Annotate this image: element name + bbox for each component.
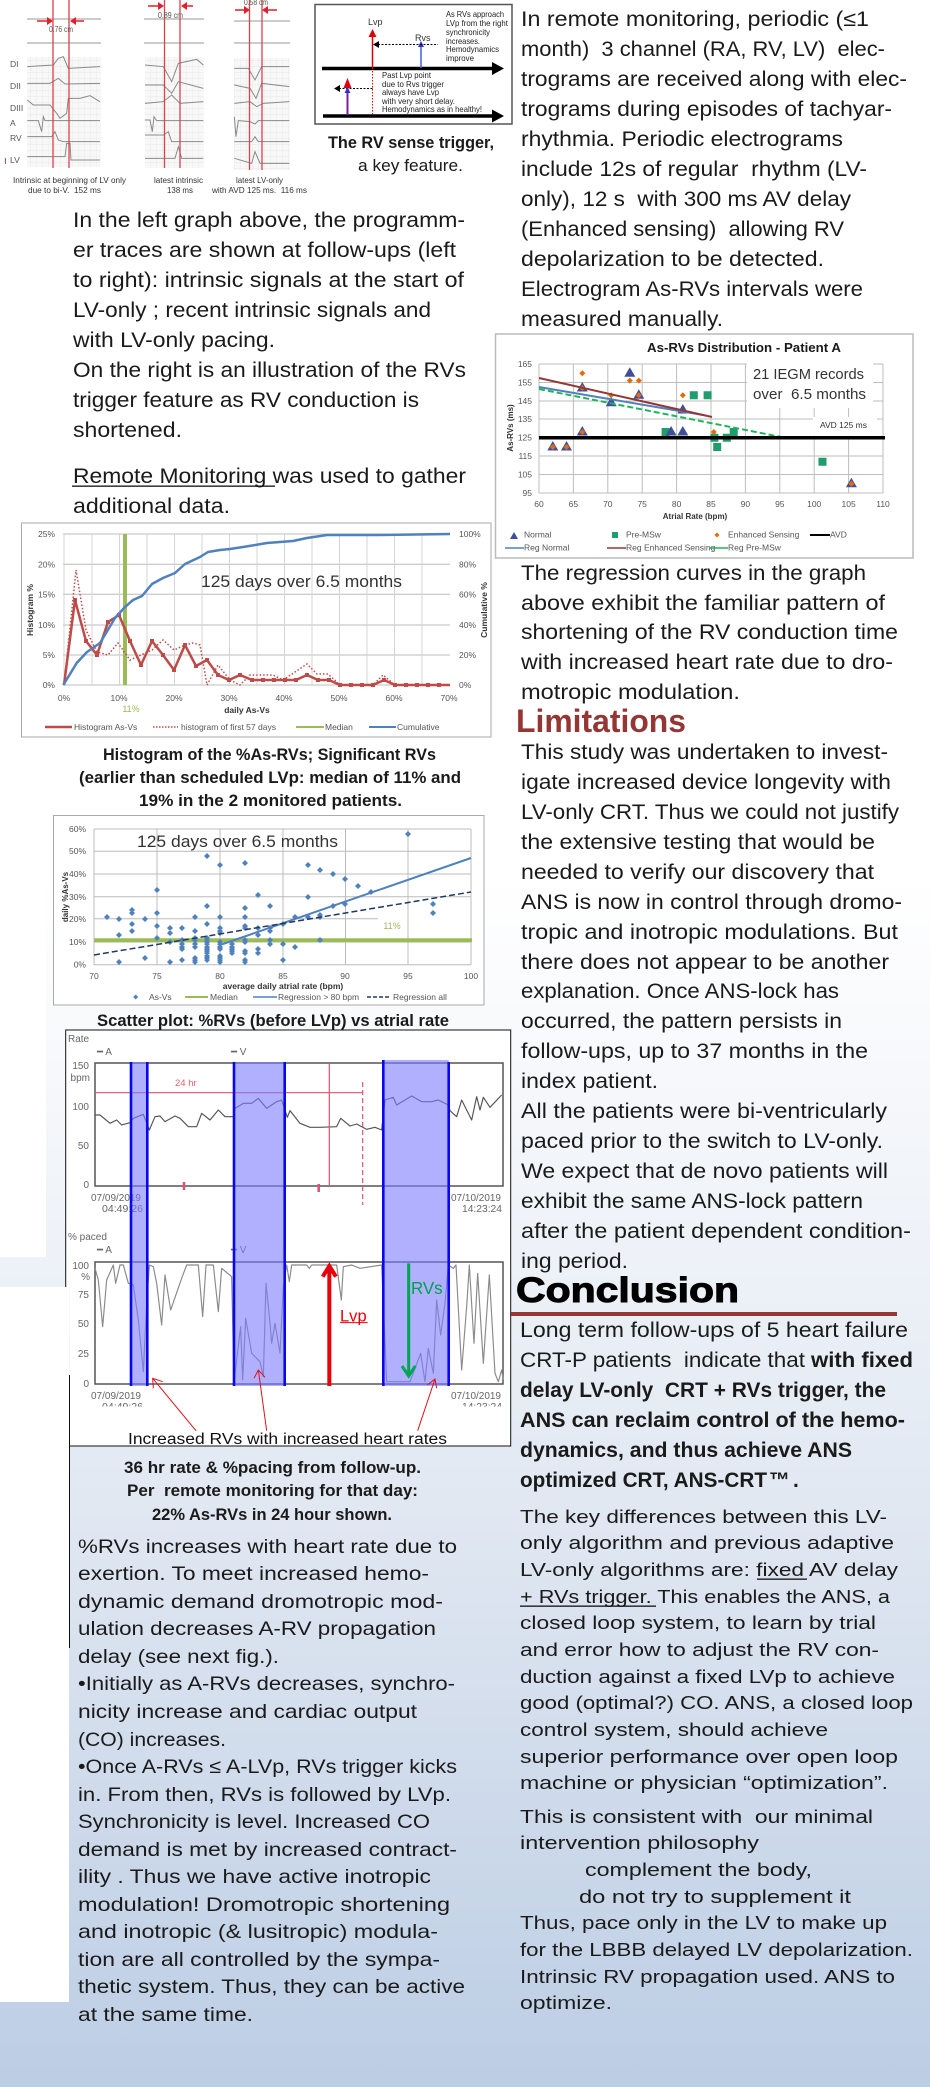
text block: minimal intervention philosophy: complement the body,: [585, 1859, 812, 1880]
x axis labels: 100: [807, 499, 822, 509]
chart: histogram of %As-RVs: 11%: [122, 704, 140, 714]
text block: key differences: superior performance over open loop: [520, 1746, 898, 1767]
x axis labels: 85: [706, 499, 716, 509]
labels of the trend plots: 07/09/2019: [91, 1391, 141, 1402]
text block: %RVs increases with heart rate: [78, 1536, 465, 2026]
text block: remote monitoring electrograms: (Enhanced sensing) allowing RV: [521, 218, 844, 241]
text block: limitations: occurred, the pattern persists in: [521, 1010, 842, 1033]
caption: trend plot: 36 hr rate & %pacing from follow-up.: [124, 1458, 421, 1477]
text block: programmer traces description: shortened.: [73, 419, 182, 442]
diagram: RV sense trigger illustration: Hemodynamics: [446, 44, 499, 54]
legend: Regression all: [393, 992, 447, 1002]
text block: limitations: there does not appear to be another: [521, 951, 889, 974]
x axis labels: 60%: [385, 693, 403, 703]
labels of the trend plots: [68, 1034, 502, 1413]
chart: 36 hour rate and pacing trend: 24 hr: [175, 1078, 197, 1089]
figure: programmer ECG traces at three follow-ups: 0.89 cm: [158, 10, 183, 20]
legend: Reg Normal: [524, 542, 569, 552]
y axis labels: 105: [518, 470, 532, 480]
text block: programmer traces description: er traces are shown at follow-ups (left: [73, 239, 456, 262]
text block: conclusion summary: delay LV-only CRT + RVs trigger, the: [520, 1379, 886, 1402]
y axis labels: 95: [523, 488, 532, 498]
legend: Median: [210, 992, 238, 1002]
labels of the trend plots: 14:23:24: [462, 1204, 502, 1215]
text block: conclusion summary: CRT-P patients indicate that: [520, 1349, 805, 1372]
text block: regression curves: motropic modulation.: [521, 681, 740, 704]
x axis labels: 70: [89, 971, 99, 981]
figure: programmer ECG traces at three follow-ups: [5, 0, 307, 195]
text block: minimal intervention philosophy: intervention philosophy: [520, 1832, 760, 1853]
labels of the trend plots: %: [81, 1272, 90, 1283]
text block: minimal intervention philosophy: for the LBBB delayed LV depolarization.: [520, 1939, 913, 1960]
x axis labels: 100: [464, 971, 478, 981]
left axis labels: 25%: [38, 529, 55, 539]
labels of the trend plots: 150: [72, 1061, 89, 1072]
text block: key differences: only algorithm and previous adaptive: [520, 1532, 894, 1553]
diagram: RV sense trigger illustration: Past Lvp point: [382, 70, 432, 80]
labels of the trend plots: 100: [72, 1261, 89, 1272]
x axis labels: 75: [152, 971, 162, 981]
arrow: Lvp: Lvp: [340, 1307, 367, 1326]
text block: remote monitoring electrograms: trograms during episodes of tachyar-: [521, 98, 892, 121]
text block: remote monitoring electrograms: Electrogram As-RVs intervals were: [521, 278, 863, 301]
caption: trend plot: 22% As-RVs in 24 hour shown.: [152, 1505, 392, 1524]
text block: limitations: needed to verify our discovery that: [521, 861, 874, 884]
figure: programmer ECG traces at three follow-ups: latest intrinsic: [154, 175, 204, 185]
left axis labels: [38, 529, 55, 690]
labels of the trend plots: 07/10/2019: [451, 1391, 501, 1402]
text block: regression curves: The regression curves in the graph: [521, 562, 866, 585]
x axis labels: 30%: [220, 693, 238, 703]
text block: %RVs increases with heart rate: in. From then, RVs is followed by LVp.: [78, 1784, 451, 1806]
text block: conclusion summary: ANS can reclaim control of the hemo-: [520, 1409, 905, 1432]
labels of the trend plots: 07/09/2019: [91, 1193, 141, 1204]
right axis labels: 60%: [459, 590, 476, 600]
text block: limitations: index patient.: [521, 1070, 658, 1093]
diagram: RV sense trigger illustration: with very short delay.: [381, 96, 455, 106]
y axis labels: 40%: [69, 869, 86, 879]
text block: %RVs increases with heart rate: and inotropic (& lusitropic) modula-: [78, 1921, 438, 1943]
legend: AVD: [830, 530, 847, 540]
labels of the trend plots: 50: [78, 1319, 89, 1330]
text block: limitations: This study was undertaken to invest-: [521, 741, 888, 764]
text block: limitations: the extensive testing that would be: [521, 831, 875, 854]
text block: remote monitoring note: [72, 465, 466, 518]
labels of the trend plots: 100: [72, 1102, 89, 1113]
regression lines and AVD line: [539, 378, 885, 438]
text block: %RVs increases with heart rate: ulation decreases A-RV propagation: [78, 1618, 436, 1640]
y axis labels: 115: [518, 451, 532, 461]
text block: minimal intervention philosophy: Intrinsic RV propagation used. ANS to: [520, 1966, 895, 1987]
diagram: RV sense trigger illustration: Rvs: [415, 33, 431, 43]
right axis labels: 20%: [459, 650, 476, 660]
diagram: RV sense trigger illustration: Lvp: [368, 17, 383, 27]
labels of the trend plots: ━ V: [230, 1047, 247, 1058]
legend: Regression > 80 bpm: [278, 992, 359, 1002]
legend: [505, 530, 847, 552]
left axis labels: 20%: [38, 560, 55, 570]
labels of the trend plots: 75: [78, 1290, 89, 1301]
text block: %RVs increases with heart rate: Synchronicity is level. Increased CO: [78, 1811, 430, 1833]
text block: key differences: The key differences between this LV-: [520, 1506, 887, 1527]
labels of the trend plots: % paced: [68, 1232, 107, 1243]
labels of the trend plots: 0: [83, 1180, 89, 1191]
chart: As-RVs distribution patient A: [496, 334, 913, 558]
figure: programmer ECG traces at three follow-ups: with AVD 125 ms. 116 ms: [211, 185, 307, 195]
y axis labels: 165: [518, 359, 532, 369]
x axis labels: 0%: [58, 693, 71, 703]
text block: key differences: LV-only algorithms are: fixed AV delay: [520, 1559, 899, 1580]
text block: regression curves: shortening of the RV conduction time: [521, 621, 898, 644]
text block: key differences: and error how to adjust the RV con-: [520, 1639, 879, 1660]
caption: trend plot: Per remote monitoring for that day:: [127, 1481, 418, 1500]
figure: programmer ECG traces at three follow-ups: LV: [10, 155, 20, 165]
annotation: record count: over 6.5 months: [753, 386, 866, 403]
text block: key differences: closed loop system, to learn by trial: [520, 1612, 876, 1633]
chart: scatter plot: [54, 816, 484, 1005]
text block: programmer traces description: trigger feature as RV conduction is: [73, 389, 419, 412]
chart: scatter plot: daily %As-Vs: [61, 871, 70, 922]
figure: programmer ECG traces at three follow-ups: A: [10, 118, 16, 128]
arrow: RVs: [402, 1263, 443, 1376]
labels of the trend plots: Rate: [68, 1034, 90, 1045]
x axis labels: 90: [741, 499, 750, 509]
annotation: 125 days: 125 days over 6.5 months: [201, 572, 402, 591]
text block: minimal intervention philosophy: This is consistent with our minimal: [520, 1806, 873, 1827]
text block: limitations: ANS is now in control through dromo-: [521, 891, 902, 914]
y axis labels: 50%: [69, 846, 86, 856]
labels of the trend plots: 04:49:26: [102, 1204, 143, 1215]
text block: key differences: good (optimal?) CO. ANS, a closed loop: [520, 1692, 913, 1713]
caption: histogram: (earlier than scheduled LVp: median of 11% and: [79, 768, 461, 787]
y axis labels: 10%: [69, 937, 86, 947]
x axis labels: 20%: [165, 693, 183, 703]
text block: %RVs increases with heart rate: demand is met by increased contract-: [78, 1839, 457, 1861]
text block: limitations: tropic and inotropic modulations. But: [521, 921, 898, 944]
diagram: RV sense trigger illustration: due to Rvs trigger: [382, 79, 444, 89]
left axis labels: 15%: [38, 590, 55, 600]
figure: programmer ECG traces at three follow-ups: DI: [10, 59, 18, 69]
text block: remote monitoring electrograms: rhythmia. Periodic electrograms: [521, 128, 843, 151]
text block: minimal intervention philosophy: [520, 1806, 913, 2013]
labels of the trend plots: ━ V: [230, 1245, 247, 1256]
figure: programmer ECG traces at three follow-ups: due to bi-V. 152 ms: [28, 185, 101, 195]
arrow: Lvp: [323, 1266, 368, 1386]
text block: remote monitoring electrograms: [521, 8, 907, 331]
x axis labels: 90: [340, 971, 350, 981]
labels of the trend plots: ━ A: [96, 1245, 112, 1256]
data points: [547, 367, 857, 487]
text block: limitations: after the patient dependent condition-: [521, 1220, 911, 1243]
legend: [45, 722, 440, 732]
left axis labels: 0%: [43, 680, 55, 690]
y axis labels: 60%: [69, 824, 86, 834]
diagram: RV sense trigger illustration: As RVs approach: [446, 9, 504, 19]
x axis labels: 110: [876, 499, 890, 509]
x axis labels: 85: [278, 971, 288, 981]
text block: key differences: + RVs trigger. This enables the ANS, a: [520, 1586, 891, 1607]
chart: scatter plot: average daily atrial rate (bpm): [223, 981, 343, 991]
labels of the trend plots: 0: [83, 1379, 89, 1390]
legend: Reg Enhanced Sensing: [626, 542, 716, 552]
right axis labels: [459, 529, 481, 690]
text block: %RVs increases with heart rate: thetic system. Thus, they can be active: [78, 1976, 465, 1998]
right axis labels: 80%: [459, 560, 476, 570]
text block: %RVs increases with heart rate: tion are all controlled by the sympa-: [78, 1949, 440, 1971]
text block: programmer traces description: LV-only ; recent intrinsic signals and: [73, 299, 431, 322]
y axis labels: 145: [518, 396, 532, 406]
text block: conclusion summary: optimized CRT, ANS-CRT: [520, 1469, 767, 1492]
text block: limitations: ing period.: [521, 1250, 628, 1273]
text block: remote monitoring electrograms: measured manually.: [521, 308, 723, 331]
figure: programmer ECG traces at three follow-ups: DII: [10, 81, 21, 91]
text block: regression curves: with increased heart rate due to dro-: [520, 651, 893, 674]
text block: %RVs increases with heart rate: %RVs increases with heart rate due to: [78, 1536, 457, 1558]
text block: remote monitoring electrograms: only), 12 s with 300 ms AV delay: [521, 188, 852, 211]
chart: histogram of %As-RVs: Histogram %: [25, 584, 35, 636]
text block: limitations: follow-ups, up to 37 months in the: [521, 1040, 868, 1063]
y axis labels: 30%: [69, 892, 86, 902]
text block: limitations: igate increased device longevity with: [521, 771, 891, 794]
caption: RV sense trigger: a key feature.: [358, 156, 463, 175]
chart: As-RVs distribution patient A: As-RVs (ms): [506, 404, 515, 452]
x axis labels: 105: [842, 499, 856, 509]
right axis labels: 0%: [459, 680, 472, 690]
labels of the trend plots: 50: [78, 1141, 89, 1152]
diagram: RV sense trigger illustration: increases.: [446, 36, 480, 46]
text block: limitations: exhibit the same ANS-lock pattern: [521, 1190, 863, 1213]
right axis labels: 40%: [459, 620, 476, 630]
text block: remote monitoring electrograms: trograms are received along with elec-: [521, 68, 907, 91]
left axis labels: 10%: [38, 620, 55, 630]
text block: remote monitoring electrograms: month) 3 channel (RA, RV, LV) elec-: [521, 38, 885, 61]
24 hour markers: [95, 1063, 363, 1205]
diagram: RV sense trigger illustration: [315, 4, 512, 124]
text block: %RVs increases with heart rate: ility . Thus we have active inotropic: [78, 1866, 431, 1888]
y axis labels: 155: [518, 378, 532, 388]
legend: Median: [325, 722, 353, 732]
figure: programmer ECG traces at three follow-ups: DIII: [10, 103, 23, 113]
divider under Conclusion: [511, 1312, 897, 1316]
heading: Conclusion: Conclusion: [516, 1271, 739, 1310]
y axis labels: 20%: [69, 914, 86, 924]
caption: RV sense trigger: The RV sense trigger,: [328, 133, 494, 152]
diagram: RV sense trigger illustration: improve: [446, 53, 474, 63]
chart title: As-RVs Distribution - Patient A: [647, 341, 841, 355]
text block: remote monitoring electrograms: include 12s of regular rhythm (LV-: [521, 158, 867, 181]
text block: programmer traces description: [72, 209, 466, 442]
text block: key differences: control system, should achieve: [520, 1719, 828, 1740]
x axis labels: 40%: [275, 693, 293, 703]
labels of the trend plots: 04:49:26: [102, 1402, 143, 1413]
figure: programmer ECG traces at three follow-ups: RV: [10, 133, 22, 143]
figure: programmer ECG traces at three follow-ups: 0.76 cm: [49, 24, 73, 34]
x axis labels: 50%: [330, 693, 348, 703]
labels of the trend plots: bpm: [71, 1073, 90, 1084]
x axis labels: 75: [637, 499, 647, 509]
legend: histogram of first 57 days: [181, 722, 276, 732]
y axis labels: [518, 359, 532, 498]
text block: key differences: machine or physician “optimization”.: [520, 1772, 888, 1793]
chart: As-RVs distribution patient A: Atrial Rate (bpm): [663, 512, 728, 521]
x axis labels: 95: [775, 499, 785, 509]
x axis labels: 80: [672, 499, 682, 509]
x axis labels: [89, 971, 478, 981]
caption: histogram: [79, 745, 461, 810]
diagram: RV sense trigger illustration: always have Lvp: [382, 87, 439, 97]
text block: key differences: [520, 1506, 913, 1793]
text block: conclusion summary: dynamics, and thus achieve ANS: [520, 1439, 852, 1462]
text block: minimal intervention philosophy: optimize.: [520, 1992, 612, 2013]
text block: remote monitoring electrograms: depolarization to be detected.: [521, 248, 824, 271]
arrow: RVs: RVs: [411, 1278, 443, 1298]
text block: programmer traces description: On the right is an illustration of the RVs: [73, 359, 466, 382]
chart: histogram of %As-RVs: Cumulative %: [479, 582, 489, 638]
text block: limitations: paced prior to the switch to LV-only.: [521, 1130, 883, 1153]
text block: %RVs increases with heart rate: •Initially as A-RVs decreases, synchro-: [78, 1673, 455, 1695]
text block: conclusion summary: Long term follow-ups of 5 heart failure: [520, 1319, 908, 1342]
arrows: increased RVs pointers: [153, 1370, 437, 1431]
text block: conclusion summary: .: [793, 1469, 799, 1492]
legend: Histogram As-Vs: [74, 722, 137, 732]
text block: limitations: We expect that de novo patients will: [521, 1160, 888, 1183]
x axis labels: 70: [603, 499, 613, 509]
annotation: increased RVs: Increased RVs with increased heart rates: [128, 1431, 447, 1448]
text block: minimal intervention philosophy: do not try to supplement it: [579, 1886, 851, 1907]
legend: Pre-MSw: [626, 530, 662, 540]
caption: scatter plot: Scatter plot: %RVs (before LVp) vs atrial rate: [97, 1011, 449, 1030]
y axis labels: 125: [518, 432, 532, 442]
shaded high-rate bands: [131, 1060, 449, 1386]
text block: limitations: explanation. Once ANS-lock has: [521, 980, 839, 1003]
x axis labels: 65: [569, 499, 578, 509]
diagram: RV sense trigger illustration: LVp from the right: [446, 18, 509, 28]
y axis labels: [69, 824, 86, 970]
text block: remote monitoring electrograms: In remote monitoring, periodic (≤1: [521, 8, 869, 31]
text block: %RVs increases with heart rate: modulation! Dromotropic shortening: [78, 1894, 450, 1916]
text block: remote monitoring note: Remote Monitoring was used to gather: [73, 465, 466, 488]
x axis labels: 70%: [440, 693, 458, 703]
annotation: record count: AVD 125 ms: [820, 420, 867, 430]
x axis labels: [58, 693, 458, 703]
right axis labels: 100%: [459, 529, 481, 539]
legend: Reg Pre-MSw: [728, 542, 782, 552]
text block: limitations: LV-only CRT. Thus we could not justify: [521, 801, 900, 824]
chart: scatter plot: 11%: [383, 921, 401, 931]
left axis labels: 5%: [43, 650, 55, 660]
labels of the trend plots: 25: [78, 1349, 89, 1360]
text block: %RVs increases with heart rate: (CO) increases.: [78, 1729, 226, 1751]
legend: Cumulative: [397, 722, 440, 732]
y axis labels: 0%: [74, 960, 86, 970]
labels of the trend plots: ━ A: [96, 1047, 112, 1058]
text block: minimal intervention philosophy: Thus, pace only in the LV to make up: [520, 1912, 887, 1933]
caption: trend plot: [124, 1458, 421, 1524]
diagram: RV sense trigger illustration: synchronicity: [446, 27, 491, 37]
figure: programmer ECG traces at three follow-ups: 138 ms: [167, 185, 193, 195]
x axis labels: 10%: [110, 693, 128, 703]
legend: [133, 992, 447, 1002]
chart: 36 hour rate and pacing trend: [66, 1030, 511, 1648]
labels of the trend plots: 14:23:24: [462, 1402, 502, 1413]
x axis labels: [534, 499, 890, 509]
legend: Normal: [524, 530, 552, 540]
text block: programmer traces description: to right): intrinsic signals at the start of: [73, 269, 464, 292]
text block: %RVs increases with heart rate: at the same time.: [78, 2004, 253, 2026]
chart: histogram of %As-RVs: daily As-Vs: [224, 705, 270, 715]
labels of the trend plots: 07/10/2019: [451, 1193, 501, 1204]
text block: %RVs increases with heart rate: •Once A-RVs ≤ A-LVp, RVs trigger kicks: [78, 1756, 457, 1778]
annotation: record count: 21 IEGM records: [753, 366, 864, 383]
text block: programmer traces description: with LV-only pacing.: [72, 329, 275, 352]
legend: Enhanced Sensing: [728, 530, 800, 540]
text block: remote monitoring note: additional data.: [73, 495, 230, 518]
annotation: 125 days: 125 days over 6.5 months: [137, 832, 338, 851]
y axis labels: 135: [518, 414, 532, 424]
diagram: RV sense trigger illustration: Hemodynamics as in healthy!: [382, 104, 482, 114]
text block: limitations: All the patients were bi-ventricularly: [521, 1100, 888, 1123]
text block: key differences: duction against a fixed LVp to achieve: [520, 1666, 895, 1687]
chart: histogram of %As-RVs: [22, 523, 491, 737]
text block: %RVs increases with heart rate: delay (see next fig.).: [78, 1646, 279, 1668]
rate trace: [95, 1095, 503, 1382]
x axis labels: 60: [534, 499, 544, 509]
text block: regression curves: [520, 562, 898, 704]
caption: histogram: Histogram of the %As-RVs; Significant RVs: [103, 745, 436, 764]
x axis labels: 95: [403, 971, 413, 981]
text block: %RVs increases with heart rate: exertion. To meet increased hemo-: [78, 1563, 429, 1585]
figure: programmer ECG traces at three follow-ups: Intrinsic at beginning of LV only: [13, 175, 127, 185]
heading: Limitations: Limitations: [516, 703, 686, 739]
text block: %RVs increases with heart rate: dynamic demand dromotropic mod-: [78, 1591, 443, 1613]
legend: As-Vs: [149, 992, 172, 1002]
text block: programmer traces description: In the left graph above, the programm-: [73, 209, 465, 232]
annotation: record count: [753, 366, 867, 430]
text block: conclusion summary: ™: [769, 1469, 790, 1492]
text block: conclusion summary: [520, 1319, 913, 1492]
text block: %RVs increases with heart rate: nicity increase and cardiac output: [78, 1701, 418, 1723]
text block: conclusion summary: with fixed: [810, 1349, 913, 1372]
text block: limitations: [521, 741, 911, 1273]
x axis labels: 80: [215, 971, 225, 981]
figure: programmer ECG traces at three follow-ups: latest LV-only: [236, 175, 284, 185]
caption: RV sense trigger: [328, 133, 494, 175]
text block: regression curves: above exhibit the familiar pattern of: [521, 592, 885, 615]
caption: histogram: 19% in the 2 monitored patients.: [139, 791, 402, 810]
